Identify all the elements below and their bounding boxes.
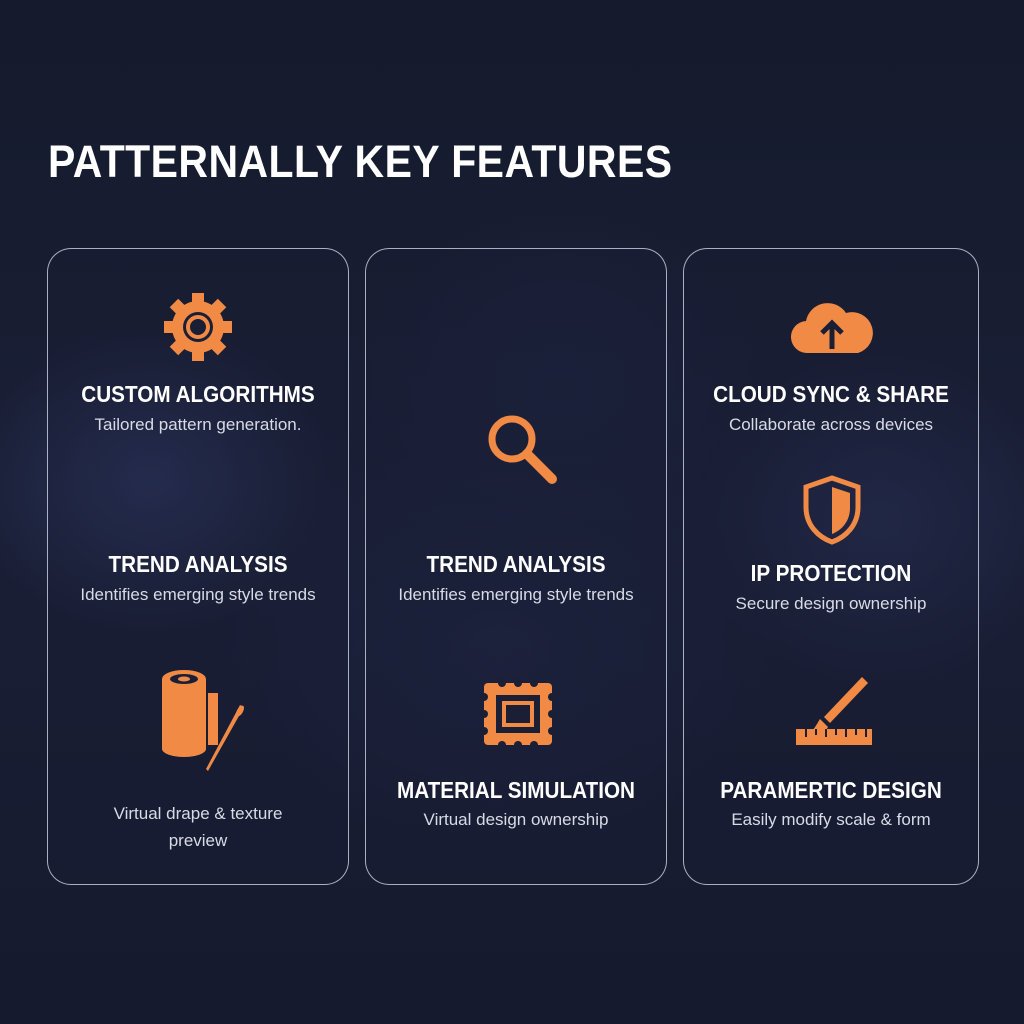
title: PATTERNALLY KEY FEATURES [48,136,673,187]
text: virtual drape [114,804,282,850]
heading: custom algorithms: CUSTOM ALGORITHMS [81,381,315,407]
icon: fabric roll [162,670,244,771]
text: trend analysis: Identifies emerging style trends [80,585,316,604]
panel: right [683,248,979,885]
text: ip protection: Secure design ownership [736,594,926,613]
text: virtual drape: Virtual drape & texture [114,804,282,823]
heading: trend analysis: TREND ANALYSIS [108,551,288,577]
icon: gear [164,293,232,361]
text: cloud sync: Collaborate across devices [729,415,933,434]
text: material simulation: Virtual design ownership [424,810,608,829]
icon: cloud upload [790,303,873,353]
heading: parametric design: PARAMERTIC DESIGN [720,777,942,803]
text: custom algorithms: Tailored pattern generation. [94,415,301,434]
panel: middle [365,248,667,885]
icon: brush and ruler [796,677,872,745]
heading: ip protection: IP PROTECTION [751,560,911,586]
heading: trend analysis: TREND ANALYSIS [426,551,606,577]
text: parametric design: Easily modify scale & form [731,810,931,829]
icon: material stamp [484,683,552,745]
text: virtual drape: preview [169,831,227,850]
text: trend analysis: Identifies emerging style trends [398,585,634,604]
icon: magnifier [488,416,557,484]
icon: shield [804,475,860,545]
heading: cloud sync: CLOUD SYNC & SHARE [713,381,949,407]
panel: left [47,248,349,885]
heading: material simulation: MATERIAL SIMULATION [397,777,635,803]
